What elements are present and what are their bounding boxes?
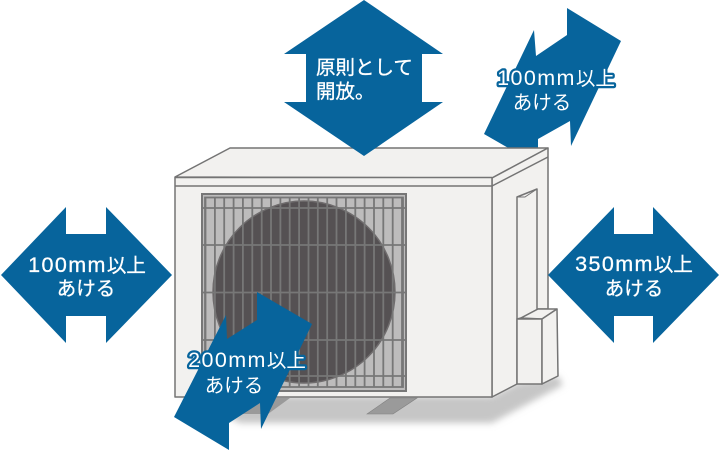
arrow: front clearance 200mm: あける: [205, 375, 263, 397]
arrow: front clearance 200mm: [174, 292, 312, 450]
floor shadow: [178, 376, 563, 423]
arrow: right clearance 350mm: 350mm以上: [575, 252, 693, 276]
arrow: back clearance 100mm: [484, 8, 621, 165]
arrow: right clearance 350mm: [548, 207, 719, 343]
arrow: left clearance 100mm: 100mm以上: [28, 253, 146, 277]
arrow: back clearance 100mm: あける: [513, 92, 571, 114]
fan grille: [201, 193, 407, 392]
fan: [213, 201, 395, 383]
arrow: top open: 原則として: [316, 57, 413, 79]
arrow: right clearance 350mm: あける: [605, 278, 663, 300]
unit feet: [240, 398, 417, 414]
arrow: left clearance 100mm: あける: [57, 278, 115, 300]
arrow: top open: [284, 0, 443, 156]
drain box: [517, 309, 558, 384]
arrow: left clearance 100mm: [1, 207, 172, 343]
outdoor unit: [175, 148, 558, 414]
arrow: top open: 開放。: [316, 81, 375, 103]
arrow: front clearance 200mm: 200mm以上: [188, 348, 306, 372]
arrow: back clearance 100mm: 100mm以上: [497, 66, 615, 90]
unit casing: [175, 148, 548, 397]
